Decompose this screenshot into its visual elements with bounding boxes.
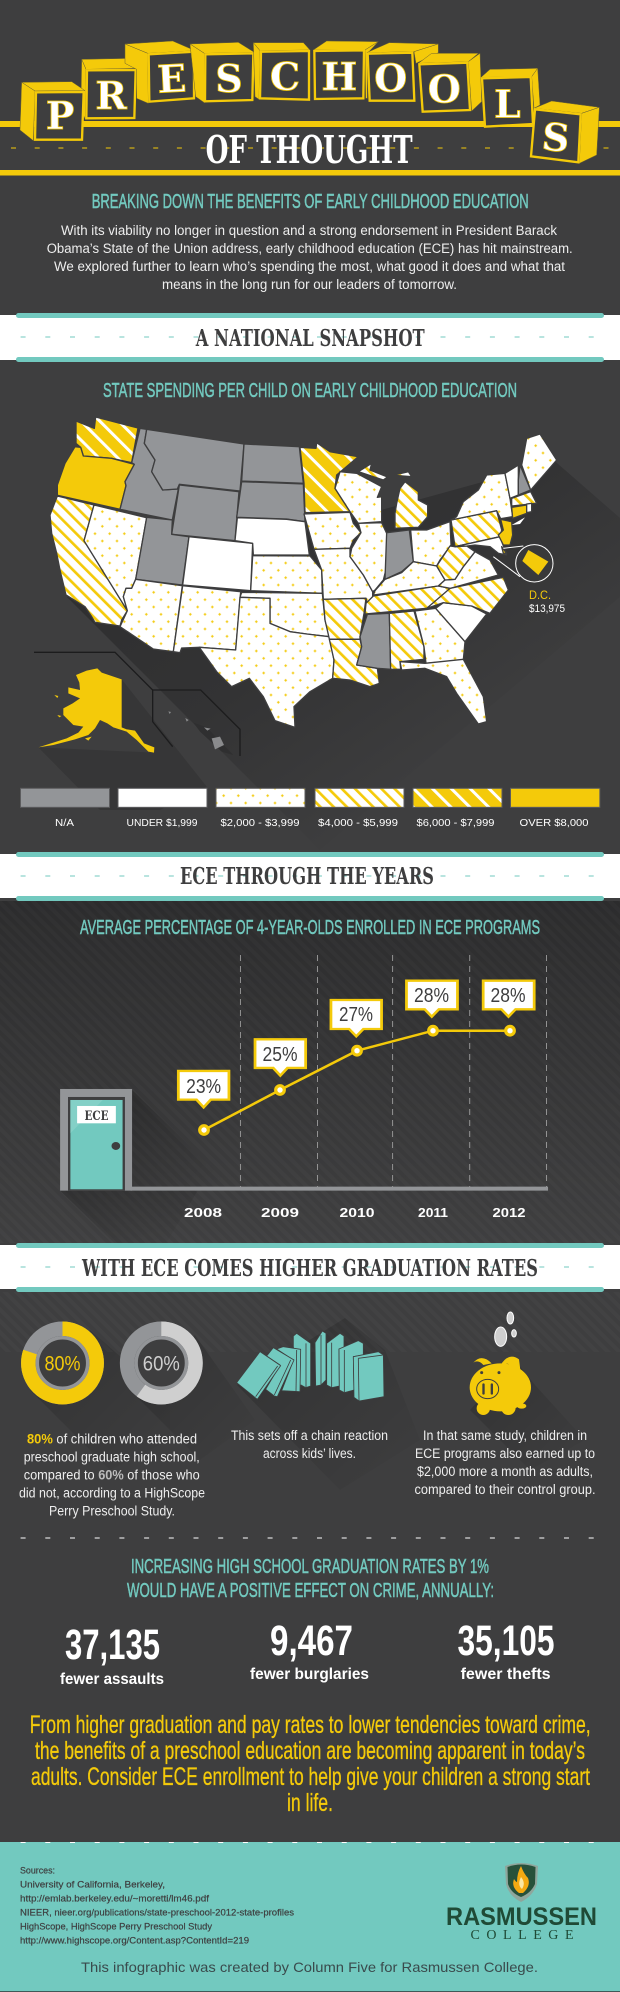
DC value: D.C.: [529, 588, 551, 602]
value callouts: [178, 981, 534, 1107]
earnings text: ECE programs also earned up to: [415, 1446, 595, 1461]
sources: HighScope, HighScope Perry Preschool Study: [20, 1922, 212, 1932]
icon: falling books: [237, 1331, 384, 1401]
letter blocks left half: [20, 41, 310, 141]
section band: higher graduation rates: [0, 1243, 620, 1292]
block letters: P: [46, 93, 74, 138]
stat: fewer thefts: fewer thefts: [461, 1666, 551, 1683]
stat: fewer burglaries: 9,467: [270, 1617, 353, 1665]
block P: [20, 82, 85, 141]
graduation text continued: [19, 1450, 205, 1518]
map legend: $6,000 - $7,999: [416, 817, 495, 829]
block E: [125, 41, 195, 103]
year axis labels: 2012: [492, 1205, 526, 1220]
map legend: $2,000 - $3,999: [220, 817, 300, 829]
yellow title rules: [0, 121, 620, 176]
map legend: [20, 788, 600, 829]
map legend: $4,000 - $5,999: [318, 817, 398, 829]
conclusion text: in life.: [287, 1789, 333, 1817]
stat: fewer assaults: 37,135: [65, 1621, 160, 1669]
subtitle text: OF THOUGHT: [206, 127, 413, 172]
sources: NIEER, nieer.org/publications/state-preschool-2012-state-profiles: [20, 1908, 294, 1918]
logo: Rasmussen College: [446, 1863, 597, 1943]
block letters: C: [270, 54, 300, 99]
chain reaction text: [231, 1428, 388, 1461]
year axis labels: 2010: [340, 1205, 374, 1220]
block O second: [418, 53, 482, 112]
donut chart: 80 percent: [28, 1329, 97, 1397]
block letters: O: [428, 66, 461, 111]
intro paragraph: We explored further to learn who’s spending the most, what good it does and what that: [54, 259, 565, 274]
icon: piggy bank and coins: [470, 1312, 531, 1415]
icon: door: [60, 1089, 132, 1191]
block L: [481, 68, 540, 127]
map long shadow: [67, 462, 620, 850]
long shadows behind icons: [30, 1318, 585, 1490]
block letters: R: [95, 73, 127, 118]
year axis labels: 2009: [261, 1205, 299, 1220]
chain reaction text: This sets off a chain reaction: [231, 1428, 388, 1443]
graduation text continued: did not, according to a HighScope: [19, 1486, 205, 1500]
value callouts: 28%: [414, 985, 449, 1007]
year axis labels: 2011: [418, 1205, 448, 1220]
panel: graduation and crime: [0, 1292, 620, 1842]
sources: http://www.highscope.org/Content.asp?ContentId=219: [20, 1936, 249, 1946]
year axis labels: [184, 1205, 526, 1220]
donut chart: 80 percent: 80%: [44, 1352, 80, 1376]
earnings text: compared to their control group.: [414, 1482, 596, 1497]
dashed year gridlines: [240, 955, 546, 1187]
stat: fewer assaults: fewer assaults: [60, 1671, 164, 1688]
panel: enrollment line chart: [0, 901, 620, 1243]
graduation text: 80% of children who attended: [27, 1432, 197, 1446]
alaska: [38, 668, 154, 753]
door shadow: [60, 1090, 221, 1243]
graduation text continued: compared to 60% of those who: [24, 1468, 200, 1482]
value callouts: 23%: [186, 1076, 221, 1098]
block letters: L: [494, 81, 521, 126]
block letters: E: [156, 55, 187, 102]
earnings text: [414, 1428, 596, 1497]
block S last: [531, 101, 599, 163]
graduation text continued: preschool graduate high school,: [24, 1450, 200, 1464]
enrollment trend line: [200, 1026, 514, 1134]
DC callout: [493, 545, 553, 582]
block letters: S: [215, 56, 243, 101]
panel: header background: [0, 0, 620, 316]
coins: [495, 1312, 516, 1346]
sources: University of California, Berkeley,: [20, 1880, 165, 1890]
intro paragraph: With its viability no longer in question and a strong endorsement in President Barack: [61, 223, 557, 238]
sources: Sources:: [20, 1866, 55, 1876]
panel: national snapshot map: [0, 362, 620, 854]
value callouts: 27%: [339, 1004, 373, 1026]
heading text: ECE THROUGH THE YEARS: [180, 863, 434, 890]
hawaii: [168, 711, 233, 755]
intro paragraph: [47, 223, 573, 292]
intro paragraph: Obama’s State of the Union address, early childhood education (ECE) has hit mainstream.: [47, 241, 573, 256]
value callouts: 28%: [490, 985, 526, 1007]
block letters: O: [374, 56, 407, 101]
panel: footer: [0, 1842, 620, 1992]
block letters: S: [540, 113, 572, 161]
block O: [367, 43, 438, 101]
stat: fewer burglaries: fewer burglaries: [250, 1666, 369, 1683]
sources: [20, 1866, 294, 1946]
earnings text: In that same study, children in: [423, 1428, 587, 1443]
conclusion text: [30, 1711, 591, 1817]
block R: [81, 58, 137, 119]
title: Preschools of Thought: [0, 41, 620, 175]
chart baseline: [130, 1187, 548, 1191]
credit line: This infographic was created by Column Five for Rasmussen College.: [81, 1959, 538, 1975]
DC value: $13,975: [529, 603, 565, 615]
eastern states: [300, 434, 557, 724]
logo: Rasmussen College: COLLEGE: [470, 1928, 574, 1943]
stat: fewer assaults: [60, 1621, 164, 1688]
DC value: [529, 588, 565, 615]
graduation text continued: Perry Preschool Study.: [49, 1504, 175, 1518]
pig: [470, 1357, 531, 1415]
earnings text: $2,000 more a month as adults,: [417, 1464, 593, 1479]
shield and flame: [505, 1863, 538, 1902]
value callouts: 25%: [262, 1044, 298, 1066]
chain reaction text: across kids’ lives.: [263, 1446, 356, 1461]
door sign text: ECE: [84, 1109, 109, 1124]
heading text: A NATIONAL SNAPSHOT: [195, 325, 425, 352]
alaska and hawaii inset: [34, 652, 240, 810]
section band: ECE through the years: [0, 852, 620, 901]
block letters: H: [321, 54, 357, 99]
block letters: [46, 54, 572, 161]
block C: [253, 43, 310, 100]
block H: [313, 41, 378, 99]
intro paragraph: means in the long run for our leaders of tomorrow.: [162, 277, 457, 292]
inset frame lines: [34, 652, 240, 756]
stat: fewer thefts: [458, 1617, 554, 1683]
sources: http://emlab.berkeley.edu/~moretti/lm46.pdf: [20, 1894, 209, 1904]
block S: [190, 42, 254, 103]
section band: a national snapshot: [0, 313, 620, 362]
map legend: UNDER $1,999: [126, 817, 198, 829]
stat: fewer burglaries: [250, 1617, 369, 1683]
stat: fewer thefts: 35,105: [458, 1617, 554, 1665]
crime heading: [127, 1556, 494, 1602]
western states: [50, 417, 334, 727]
map legend: OVER $8,000: [520, 817, 589, 829]
inset shadows: [38, 679, 207, 810]
year axis labels: 2008: [184, 1205, 222, 1220]
donut chart: 60 percent: 60%: [143, 1352, 180, 1376]
donut chart: 60 percent: [127, 1329, 196, 1397]
letter blocks right half: [313, 41, 599, 163]
map legend: N/A: [55, 817, 74, 829]
logo: Rasmussen College: RASMUSSEN: [446, 1903, 597, 1931]
